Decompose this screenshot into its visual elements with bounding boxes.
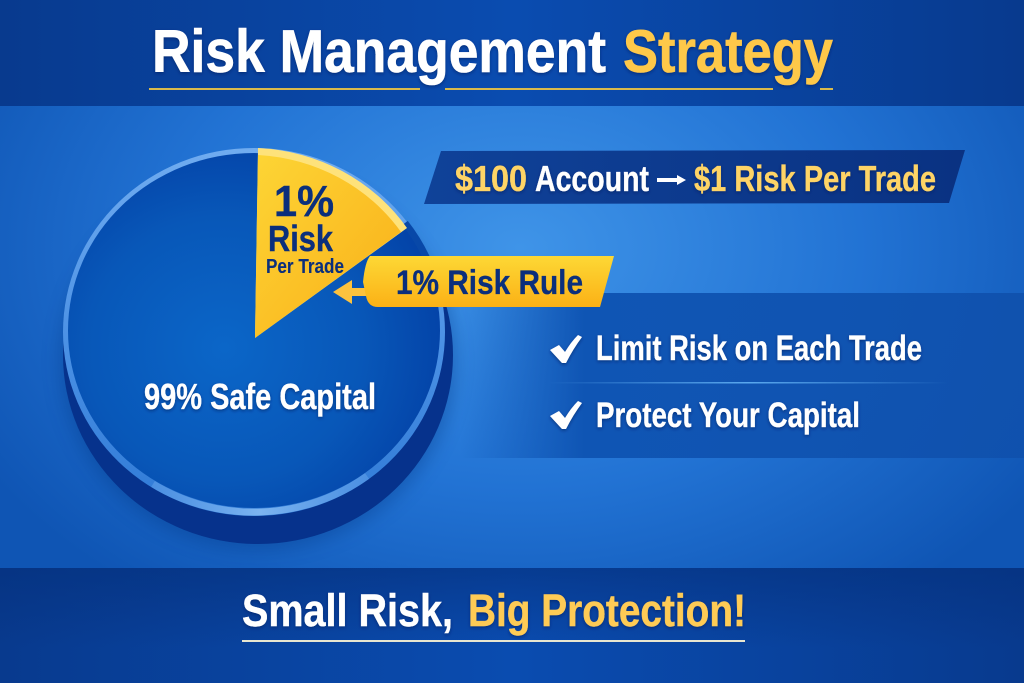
pie label: 99% Safe Capital xyxy=(144,376,376,417)
footer slogan xyxy=(242,585,746,636)
callout: 1% risk rule xyxy=(333,256,614,307)
callout: 1% risk rule: 1% Risk Rule xyxy=(396,264,583,302)
footer slogan: Big Protection! xyxy=(468,585,746,636)
title: Risk Management xyxy=(152,18,606,85)
ribbon: account risk: $100 xyxy=(455,158,527,199)
benefit: limit risk: Limit Risk on Each Trade xyxy=(596,329,922,368)
wedge label: 1% xyxy=(274,177,334,226)
callout arrow xyxy=(333,280,370,304)
wedge label: Per Trade xyxy=(266,256,344,278)
check icon xyxy=(550,335,582,363)
wedge label: Risk xyxy=(268,218,334,259)
title: Strategy xyxy=(623,18,834,85)
ribbon: account risk: Account xyxy=(535,158,649,199)
header band xyxy=(0,0,1024,106)
ribbon: account risk: $1 Risk Per Trade xyxy=(694,158,936,199)
benefits panel xyxy=(460,293,1024,458)
ribbon: account risk xyxy=(424,150,965,204)
footer slogan: Small Risk, xyxy=(242,585,453,636)
title underline xyxy=(149,88,833,90)
wedge: 1% risk xyxy=(255,148,407,338)
benefit: protect capital xyxy=(550,396,860,435)
footer band xyxy=(0,568,1024,683)
pie rim xyxy=(63,148,445,516)
footer underline xyxy=(242,640,745,642)
ribbon arrow xyxy=(657,175,686,185)
benefit: protect capital: Protect Your Capital xyxy=(596,396,860,435)
pie chart xyxy=(60,148,456,550)
pie depth xyxy=(63,166,453,544)
pie face xyxy=(68,153,440,508)
wedge label xyxy=(266,177,344,278)
check icon xyxy=(550,401,582,429)
